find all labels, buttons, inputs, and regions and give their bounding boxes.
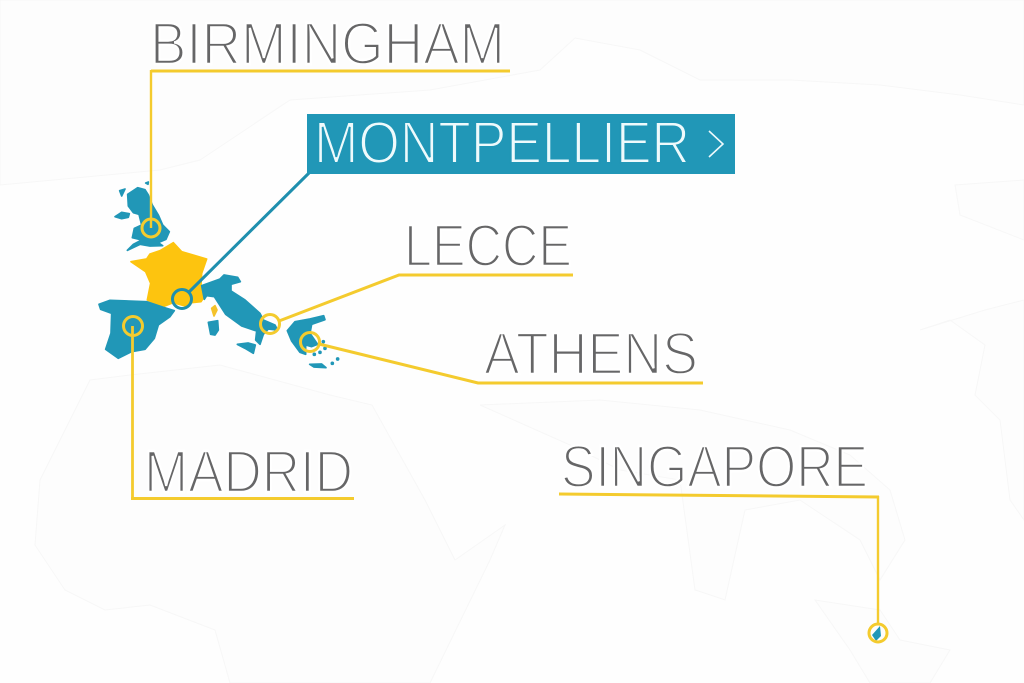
country: Italy: [202, 275, 278, 353]
connector: Singapore: [559, 494, 887, 642]
label: Lecce: LECCE: [404, 213, 572, 279]
connector: Montpellier: [172, 172, 310, 308]
country: Greece: [287, 316, 339, 368]
connector: Birmingham: [142, 70, 510, 237]
country: United Kingdom and Ireland: [115, 182, 169, 250]
label: Singapore: SINGAPORE: [561, 434, 868, 500]
label box: Montpellier: MONTPELLIER: [314, 110, 690, 176]
country: France: [131, 243, 207, 307]
label: Birmingham: BIRMINGHAM: [150, 11, 505, 77]
connector: Madrid: [124, 316, 354, 500]
connector: Lecce: [260, 275, 573, 334]
label: Athens: ATHENS: [484, 321, 698, 387]
country: Singapore: [872, 626, 881, 641]
label: Madrid: MADRID: [144, 439, 353, 505]
connector: Athens: [300, 332, 703, 383]
icon: chevron: [709, 131, 723, 157]
country: Spain: [99, 300, 174, 358]
